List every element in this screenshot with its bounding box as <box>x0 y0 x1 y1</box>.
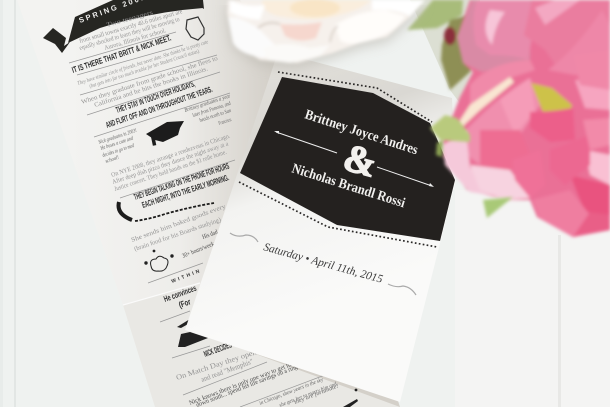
text block: circles of friends: When they graduate from grade school, she flees to <box>80 55 219 106</box>
text block: graduations: He buses a cute and <box>99 136 134 152</box>
text block: two teenagers: from small towns exactly 40.6 miles apart are <box>79 8 183 45</box>
dotted border: top <box>278 72 432 122</box>
icon: umbrella and table <box>177 319 208 347</box>
text block: baked goods <box>130 203 227 260</box>
text block: match day: Nick knows there is only one way to get her <box>188 360 296 407</box>
text block: convinces: He convinces <box>162 283 198 304</box>
text block: graduations: Francisco. <box>217 117 233 127</box>
text block: baked goods: (brain food for his Boards studying). <box>133 216 224 253</box>
text block: NYE 2008: Justice concert. They hold hands on the $1 rolle home. <box>113 149 228 193</box>
flower: pink peony <box>443 0 610 237</box>
heading: Nick: NICK DECIDES <box>202 340 233 359</box>
icon: flour cloud <box>145 250 173 271</box>
banner: Spring ribbon <box>43 0 204 53</box>
ampersand: & <box>339 136 381 186</box>
text block: circles of friends: California and he hits the books in Illinois. <box>93 65 209 109</box>
text block: match day: On Match Day they open <box>175 347 258 382</box>
text block: graduations: school! <box>105 155 120 165</box>
name: Nicholas: Nicholas Brandl Rossi <box>290 162 407 211</box>
panel: front program card <box>185 52 456 402</box>
flower: green leaves <box>430 115 513 218</box>
text block: graduations: decides to go to med <box>102 143 135 159</box>
text block: graduations: Nick graduates in 2003! <box>97 128 138 146</box>
black wavy band <box>240 77 455 241</box>
text block: baked goods: She sends him baked goods every <box>130 203 227 244</box>
icon: dot and stroke at lower edge <box>343 389 358 407</box>
heading: they stay in touch <box>104 78 214 130</box>
text block: match day: in Chicago, show years in the sky <box>259 377 325 407</box>
panel: folded timeline program <box>17 0 400 407</box>
text block: circles of friends <box>76 38 219 109</box>
text block: circles of friends: They have similar circle of friends, but never date. She thinks he is pretty cute <box>76 38 209 87</box>
flourish: right <box>388 284 416 295</box>
icon: telephone with curly cord <box>119 202 214 221</box>
flourish: left <box>230 233 258 242</box>
heading: they stay in touch: THEY STAY IN TOUCH OVER HOLIDAYS, <box>114 78 196 115</box>
text block: baked goods: 30+ hours/week <box>181 240 216 260</box>
heading: phone <box>132 161 231 210</box>
text block: match day <box>175 347 340 407</box>
text block: match day: and read "Memphis" <box>200 357 254 384</box>
icon: Illinois map <box>186 17 204 40</box>
text block: two teenagers: Aurora, Illinois for school. <box>104 27 167 52</box>
text block: baked goods: His dad <box>201 229 219 241</box>
panel: folded timeline program: THEY BEGIN TALKING ON THE PHONE FOR HOURS <box>132 161 231 202</box>
text block: NYE 2008: After deep dish pizza they dance the night away at a <box>111 141 229 186</box>
flower: leaves <box>407 0 476 90</box>
arrow: left <box>274 131 337 153</box>
icon: graduation cap <box>146 121 184 146</box>
flower: white peony <box>227 0 425 68</box>
dividers <box>69 32 325 407</box>
text block: graduations: Brittney graduates a year <box>184 93 232 114</box>
text block: match day: they are fortunate! <box>293 382 340 406</box>
dotted border: bottom <box>239 182 437 247</box>
text block: convinces <box>162 283 198 310</box>
heading: it is there: IT IS THERE THAT BRITT & NICK MEET. <box>70 33 172 75</box>
text block: two teenagers: Two teenagers <box>106 9 154 29</box>
arrow: right <box>377 167 434 187</box>
text block: NYE 2008: On NYE 2008, they arrange a rendezvous in Chicago. <box>110 132 231 179</box>
text block: graduations <box>97 93 233 165</box>
name: Brittney: Brittney Joyce Andres <box>303 108 420 158</box>
heading: they stay in touch: AND FLIRT OFF AND ON THROUGHOUT THE YEARS. <box>104 84 214 130</box>
text block: circles of friends: (but gets into far too much trouble for her Student Council status). <box>88 47 201 90</box>
text block: graduations: heads north to San <box>199 108 232 124</box>
text block: graduations: later from Pomona, and <box>191 100 232 119</box>
text block: convinces: (For <box>177 296 192 310</box>
label: within: WITHIN <box>171 268 203 285</box>
date: Saturday • April 11th, 2015 <box>262 241 384 286</box>
heading: phone: EACH NIGHT, INTO THE EARLY MORNING. <box>141 172 230 210</box>
text block: two teenagers: equally shocked to learn they will be moving to <box>79 16 180 52</box>
